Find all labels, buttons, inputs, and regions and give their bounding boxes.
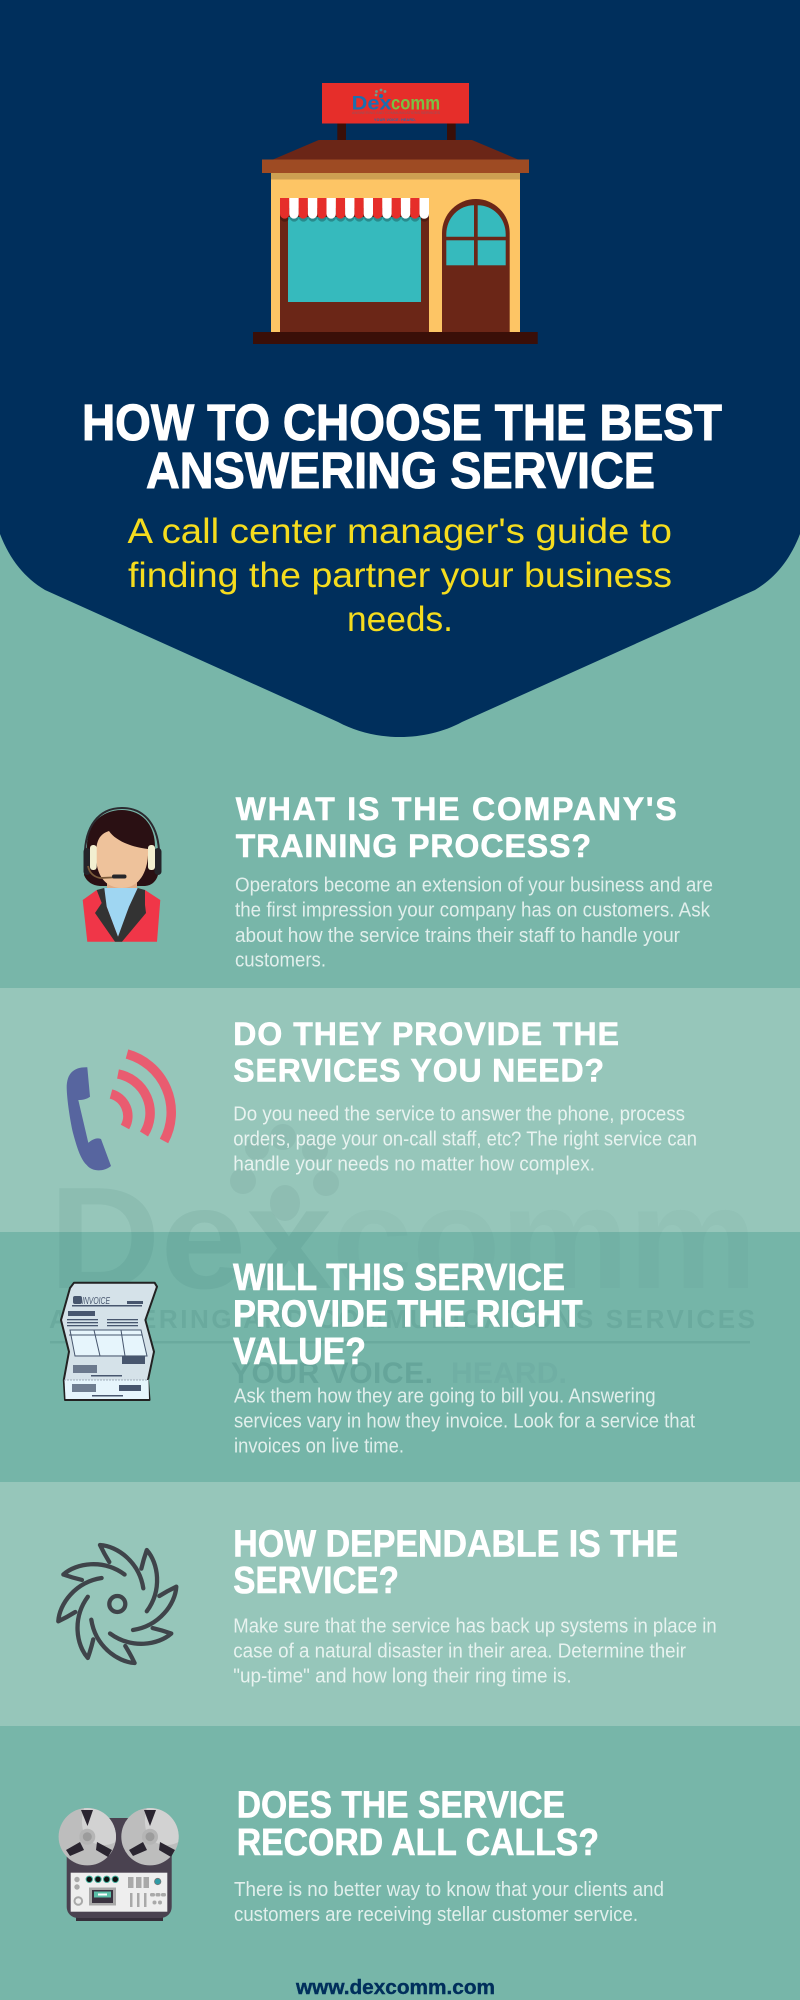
section 3 heading [233,1257,583,1373]
section 1 body: the first impression your company has on customers. Ask [235,900,711,922]
section 2 body: Do you need the service to answer the phone, process [233,1104,685,1126]
panel: dependability section band [0,1482,800,1726]
footer website link: www.dexcomm.com [295,1976,495,1999]
icon: phone with signal arcs [67,1054,171,1170]
section 2 body: handle your needs no matter how complex. [233,1154,595,1176]
shop sign: Dex [352,93,392,114]
section 2 body [233,1104,697,1176]
section 1 body: about how the service trains their staff to handle your [235,925,680,947]
subtitle: finding the partner your business [128,556,672,595]
section 4 heading: SERVICE? [233,1560,399,1602]
section 4 body: case of a natural disaster in their area. Determine their [233,1641,686,1663]
panel: recording section band [0,1726,800,2000]
panel: training section band [0,737,800,988]
panel: services section band [0,988,800,1232]
icon: invoice: INVOICE [82,1296,110,1307]
section 5 body [234,1879,664,1926]
section 3 heading: PROVIDE THE RIGHT [233,1294,583,1336]
section 4 body: "up-time" and how long their ring time is. [233,1666,572,1688]
section 3 body: services vary in how they invoice. Look for a service that [234,1411,695,1433]
section 5 body: customers are receiving stellar customer service. [234,1904,638,1926]
section 4 body: Make sure that the service has back up systems in place in [233,1616,717,1638]
section 3 body [234,1386,695,1458]
watermark logo [49,1124,757,1390]
title: HOW TO CHOOSE THE BEST [82,394,722,451]
section 4 heading [233,1524,678,1602]
section 5 body: There is no better way to know that your clients and [234,1879,664,1901]
watermark logo: YOUR VOICE. [231,1357,433,1390]
shop sign [322,83,469,124]
watermark logo: HEARD. [451,1357,567,1390]
shop window [280,198,429,332]
section 3 heading: VALUE? [233,1331,366,1373]
section 4 heading: HOW DEPENDABLE IS THE [233,1524,678,1566]
section 2 heading: SERVICES YOU NEED? [233,1053,604,1089]
icon: reel-to-reel recorder [59,1808,179,1921]
section 2 heading [233,1016,619,1089]
section 5 heading: RECORD ALL CALLS? [237,1822,599,1864]
watermark logo: ANSWERING AND COMMUNICATIONS SERVICES [49,1304,755,1334]
section 1 heading: WHAT IS THE COMPANY'S [236,791,677,827]
header panel [0,0,800,737]
shop sign: ANSWERING AND COMMUNICATIONS SERVICES [352,111,440,115]
right reel [121,1808,179,1865]
title [82,394,722,499]
section 2 heading: DO THEY PROVIDE THE [233,1016,619,1052]
section 3 body: invoices on live time. [234,1436,404,1458]
section 1 body: Operators become an extension of your business and are [235,875,713,897]
section 1 heading: TRAINING PROCESS? [236,828,591,864]
section 3 body: Ask them how they are going to bill you. Answering [234,1386,656,1408]
title: ANSWERING SERVICE [146,442,655,499]
icon: call center agent [83,808,162,942]
icon: circular saw blade [57,1544,177,1664]
shop sign: YOUR VOICE. HEARD. [374,118,416,122]
section 5 heading [237,1785,599,1864]
subtitle: needs. [347,600,453,639]
subtitle [128,512,672,639]
left reel [59,1808,116,1865]
shop sign: comm [391,93,440,114]
section 1 heading [236,791,677,864]
subtitle: A call center manager's guide to [128,512,672,551]
icon: invoice [61,1283,157,1400]
panel: value section band [0,1232,800,1482]
icon: storefront [253,83,538,344]
section 4 body [233,1616,717,1688]
section 3 heading: WILL THIS SERVICE [233,1257,565,1299]
watermark logo: comm [332,1157,757,1319]
shop door [442,199,510,332]
section 5 heading: DOES THE SERVICE [237,1785,565,1827]
section 1 body: customers. [235,950,326,972]
section 1 body [235,875,713,972]
watermark logo: Dex [49,1157,332,1319]
section 2 body: orders, page your on-call staff, etc? The right service can [233,1129,697,1151]
